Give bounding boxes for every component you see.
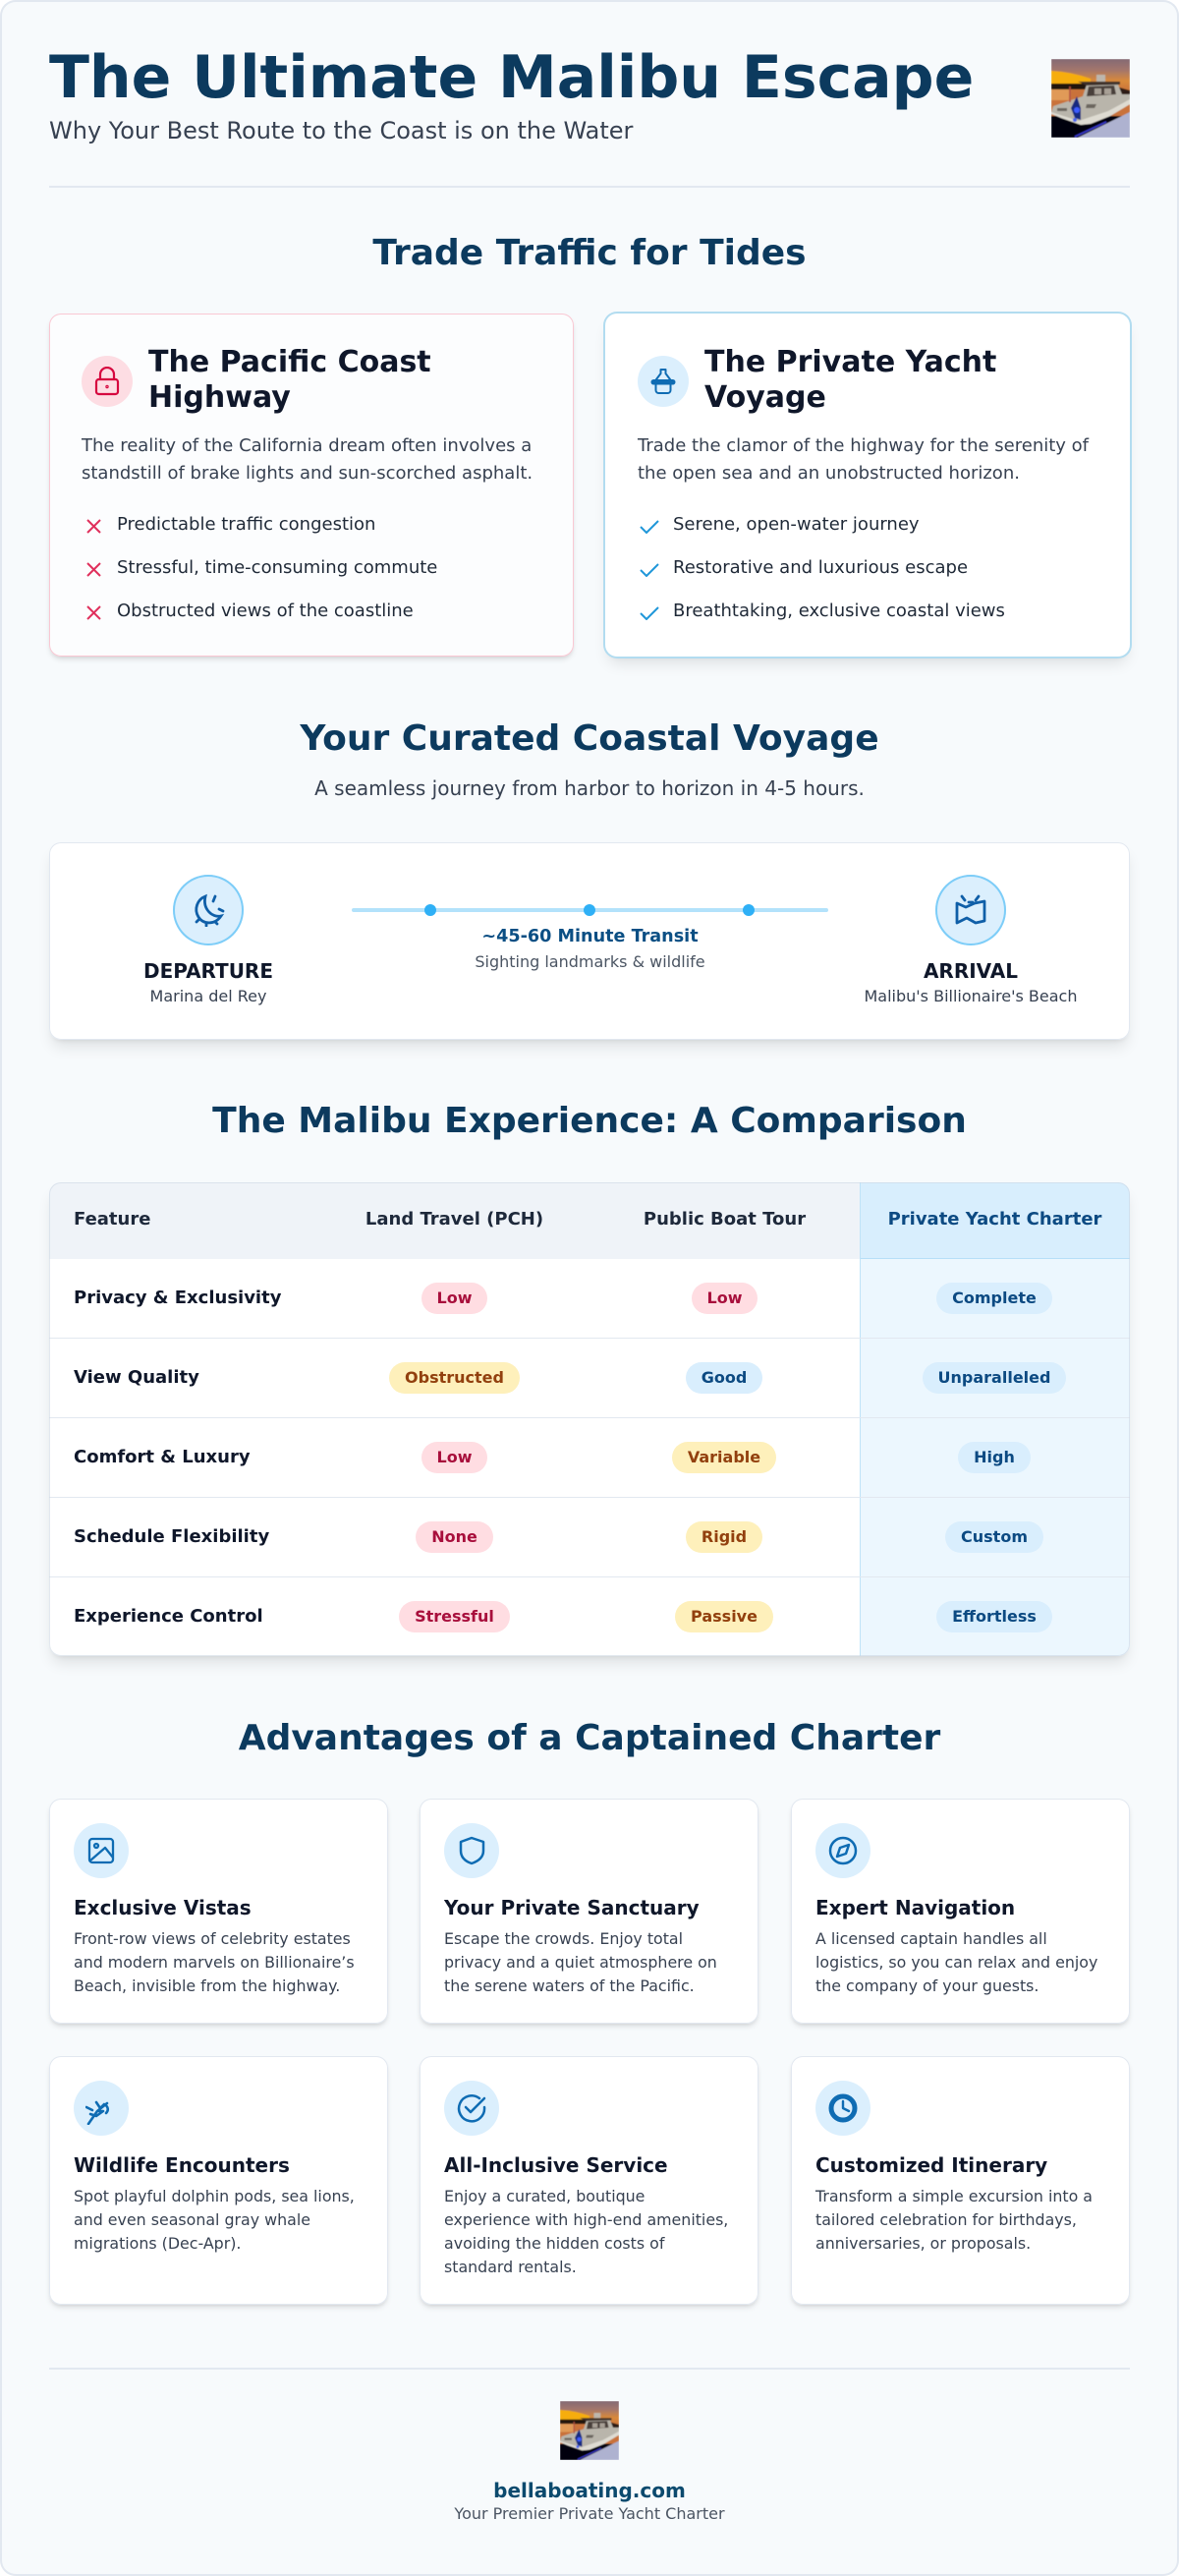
card text: logistics, so you can relax and enjoy — [815, 1953, 1097, 1972]
check icon — [640, 563, 659, 577]
feature card: wildlife — [49, 2056, 388, 2305]
section subtitle: A seamless journey from harbor to horizon in 4-5 hours. — [314, 776, 865, 800]
yacht value: Effortless — [952, 1607, 1037, 1626]
yacht value — [945, 1521, 1043, 1553]
drawback item: Obstructed views of the coastline — [117, 601, 414, 621]
boat value — [675, 1601, 773, 1632]
list of drawbacks — [86, 514, 437, 621]
land value: Stressful — [415, 1607, 494, 1626]
footer divider — [49, 2368, 1130, 2370]
row label: Schedule Flexibility — [74, 1526, 269, 1547]
card text — [444, 2187, 728, 2276]
route line — [352, 908, 828, 912]
yacht value: Complete — [952, 1288, 1037, 1307]
land value: Obstructed — [405, 1368, 504, 1387]
card text: Enjoy a curated, boutique — [444, 2187, 645, 2205]
card description: standstill of brake lights and sun-scorched asphalt. — [82, 463, 533, 484]
boat value — [686, 1362, 762, 1394]
card title: Exclusive Vistas — [74, 1896, 252, 1919]
land value — [421, 1283, 487, 1314]
land value — [421, 1442, 487, 1473]
stop dot — [743, 904, 755, 916]
feature card: exclusive vistas — [49, 1799, 388, 2024]
boat value: Good — [702, 1368, 747, 1387]
boat value: Low — [707, 1288, 742, 1307]
card text: and even seasonal gray whale — [74, 2210, 310, 2229]
benefit item: Restorative and luxurious escape — [673, 557, 968, 578]
row label: Privacy & Exclusivity — [74, 1288, 281, 1308]
card title: Expert Navigation — [815, 1896, 1015, 1919]
card description: The reality of the California dream often involves a — [82, 435, 532, 456]
row: privacy — [49, 1259, 1130, 1339]
check icon — [640, 606, 659, 620]
card text: Front-row views of celebrity estates — [74, 1929, 351, 1948]
card text: Transform a simple excursion into a — [815, 2187, 1093, 2205]
card text: tailored celebration for birthdays, — [815, 2210, 1077, 2229]
card title: All-Inclusive Service — [444, 2153, 668, 2177]
yacht value: Custom — [961, 1527, 1028, 1546]
card text: Beach, invisible from the highway. — [74, 1976, 340, 1995]
departure place: Marina del Rey — [150, 987, 266, 1005]
heading: comparison: The Malibu Experience: A Comparison — [212, 1101, 967, 1141]
card text — [444, 1929, 717, 1995]
highlighted column background — [860, 1182, 1130, 1656]
feature card: private sanctuary — [420, 1799, 758, 2024]
card title: Wildlife Encounters — [74, 2153, 290, 2177]
card text: Escape the crowds. Enjoy total — [444, 1929, 683, 1948]
header: private yacht — [860, 1182, 1130, 1259]
departure stop — [143, 875, 273, 1005]
row: schedule — [49, 1498, 1130, 1577]
card text: experience with high-end amenities, — [444, 2210, 728, 2229]
row: comfort — [49, 1418, 1130, 1498]
card text: standard rentals. — [444, 2258, 577, 2276]
list of benefits — [640, 514, 1005, 621]
land value — [389, 1362, 520, 1394]
footer tagline: Your Premier Private Yacht Charter — [454, 2504, 725, 2523]
boat value: Variable — [688, 1448, 760, 1466]
yacht value: Unparalleled — [938, 1368, 1050, 1387]
arrival place: Malibu's Billionaire's Beach — [864, 987, 1077, 1005]
heading: trade traffic: Trade Traffic for Tides — [372, 233, 807, 273]
card title: Your Private Sanctuary — [444, 1896, 700, 1919]
title: The Ultimate Malibu Escape — [49, 43, 974, 112]
card heading: Highway — [148, 380, 291, 415]
card description: Trade the clamor of the highway for the serenity of — [638, 435, 1089, 456]
icon: yacht — [638, 356, 689, 407]
header: feature: Feature — [74, 1209, 150, 1230]
card description: the open sea and an unobstructed horizon. — [638, 463, 1020, 484]
benefit item: Serene, open-water journey — [673, 514, 920, 535]
footer logo: yacht at sunset — [560, 2401, 619, 2460]
card heading: The Private Yacht — [704, 345, 996, 379]
card text: privacy and a quiet atmosphere on — [444, 1953, 717, 1972]
icon: compass — [815, 1823, 870, 1878]
heading: advantages: Advantages of a Captained Charter — [239, 1718, 940, 1758]
header: private yacht: Private Yacht Charter — [888, 1209, 1101, 1230]
icon: lock — [82, 356, 133, 407]
yacht value — [936, 1283, 1052, 1314]
logo: yacht at sunset — [1051, 59, 1130, 138]
row label: Comfort & Luxury — [74, 1447, 251, 1467]
yacht value: High — [974, 1448, 1015, 1466]
transit note: Sighting landmarks & wildlife — [475, 952, 705, 971]
land value: Low — [437, 1448, 472, 1466]
boat value — [692, 1283, 758, 1314]
land value — [399, 1601, 510, 1632]
benefit item: Breathtaking, exclusive coastal views — [673, 601, 1005, 621]
boat value: Passive — [691, 1607, 758, 1626]
row: view quality — [49, 1339, 1130, 1418]
icon: picture — [74, 1823, 129, 1878]
cross icon — [86, 519, 101, 534]
header: title block — [49, 43, 974, 144]
icon: map — [935, 875, 1006, 945]
land value — [416, 1521, 493, 1553]
row: experience control — [74, 1601, 1052, 1632]
check icon — [640, 520, 659, 534]
card description — [81, 435, 533, 484]
boat value: Rigid — [702, 1527, 747, 1546]
stop dot — [424, 904, 436, 916]
comparison table — [49, 1182, 1130, 1656]
drawback item: Predictable traffic congestion — [117, 514, 375, 535]
row label: View Quality — [74, 1367, 199, 1388]
yacht value — [958, 1442, 1031, 1473]
card text: anniversaries, or proposals. — [815, 2234, 1031, 2253]
land value: Low — [437, 1288, 472, 1307]
card heading — [148, 345, 431, 415]
card description — [637, 435, 1089, 484]
icon: check circle — [444, 2081, 499, 2136]
yacht value — [936, 1601, 1052, 1632]
card text: and modern marvels on Billionaire’s — [74, 1953, 355, 1972]
header: land travel: Land Travel (PCH) — [365, 1209, 543, 1230]
panel: voyage timeline — [49, 842, 1130, 1040]
card text: the company of your guests. — [815, 1976, 1039, 1995]
card text: A licensed captain handles all — [815, 1929, 1047, 1948]
feature card: itinerary — [791, 2056, 1130, 2305]
card heading — [704, 345, 996, 415]
transit line — [352, 904, 828, 971]
feature card: expert navigation — [791, 1799, 1130, 2024]
card text: the serene waters of the Pacific. — [444, 1976, 695, 1995]
transit time: ~45-60 Minute Transit — [481, 927, 699, 946]
cross icon — [86, 605, 101, 620]
table header — [49, 1182, 1130, 1259]
icon: wildlife — [74, 2081, 129, 2136]
table outline — [49, 1182, 1130, 1656]
card heading: Voyage — [704, 380, 826, 415]
subtitle: Why Your Best Route to the Coast is on the Water — [49, 117, 633, 144]
card text: avoiding the hidden costs of — [444, 2234, 664, 2253]
departure label: DEPARTURE — [143, 959, 273, 983]
card text: migrations (Dec-Apr). — [74, 2234, 241, 2253]
boat value — [686, 1521, 762, 1553]
header: public boat: Public Boat Tour — [644, 1209, 806, 1230]
card heading: The Pacific Coast — [148, 345, 431, 379]
land value: None — [431, 1527, 477, 1546]
card text: Spot playful dolphin pods, sea lions, — [74, 2187, 355, 2205]
panel: pacific coast highway — [49, 314, 574, 657]
row label: Experience Control — [74, 1606, 263, 1627]
feature card: all inclusive — [420, 2056, 758, 2305]
arrival label: ARRIVAL — [924, 959, 1018, 983]
card text — [815, 2187, 1093, 2253]
divider — [49, 186, 1130, 188]
drawback item: Stressful, time-consuming commute — [117, 557, 437, 578]
arrival stop — [864, 875, 1077, 1005]
stop dot — [584, 904, 595, 916]
panel: private yacht voyage — [605, 314, 1130, 657]
heading: curated voyage: Your Curated Coastal Voyage — [300, 718, 879, 759]
footer — [454, 2401, 725, 2523]
boat value — [672, 1442, 776, 1473]
icon: shield — [444, 1823, 499, 1878]
card title: Customized Itinerary — [815, 2153, 1047, 2177]
card text — [74, 2187, 355, 2253]
card text — [815, 1929, 1097, 1995]
icon: clock — [815, 2081, 870, 2136]
card text — [74, 1929, 355, 1995]
footer site name: bellaboating.com — [493, 2479, 686, 2502]
icon: moon — [173, 875, 244, 945]
cross icon — [86, 562, 101, 577]
yacht value — [923, 1362, 1066, 1394]
